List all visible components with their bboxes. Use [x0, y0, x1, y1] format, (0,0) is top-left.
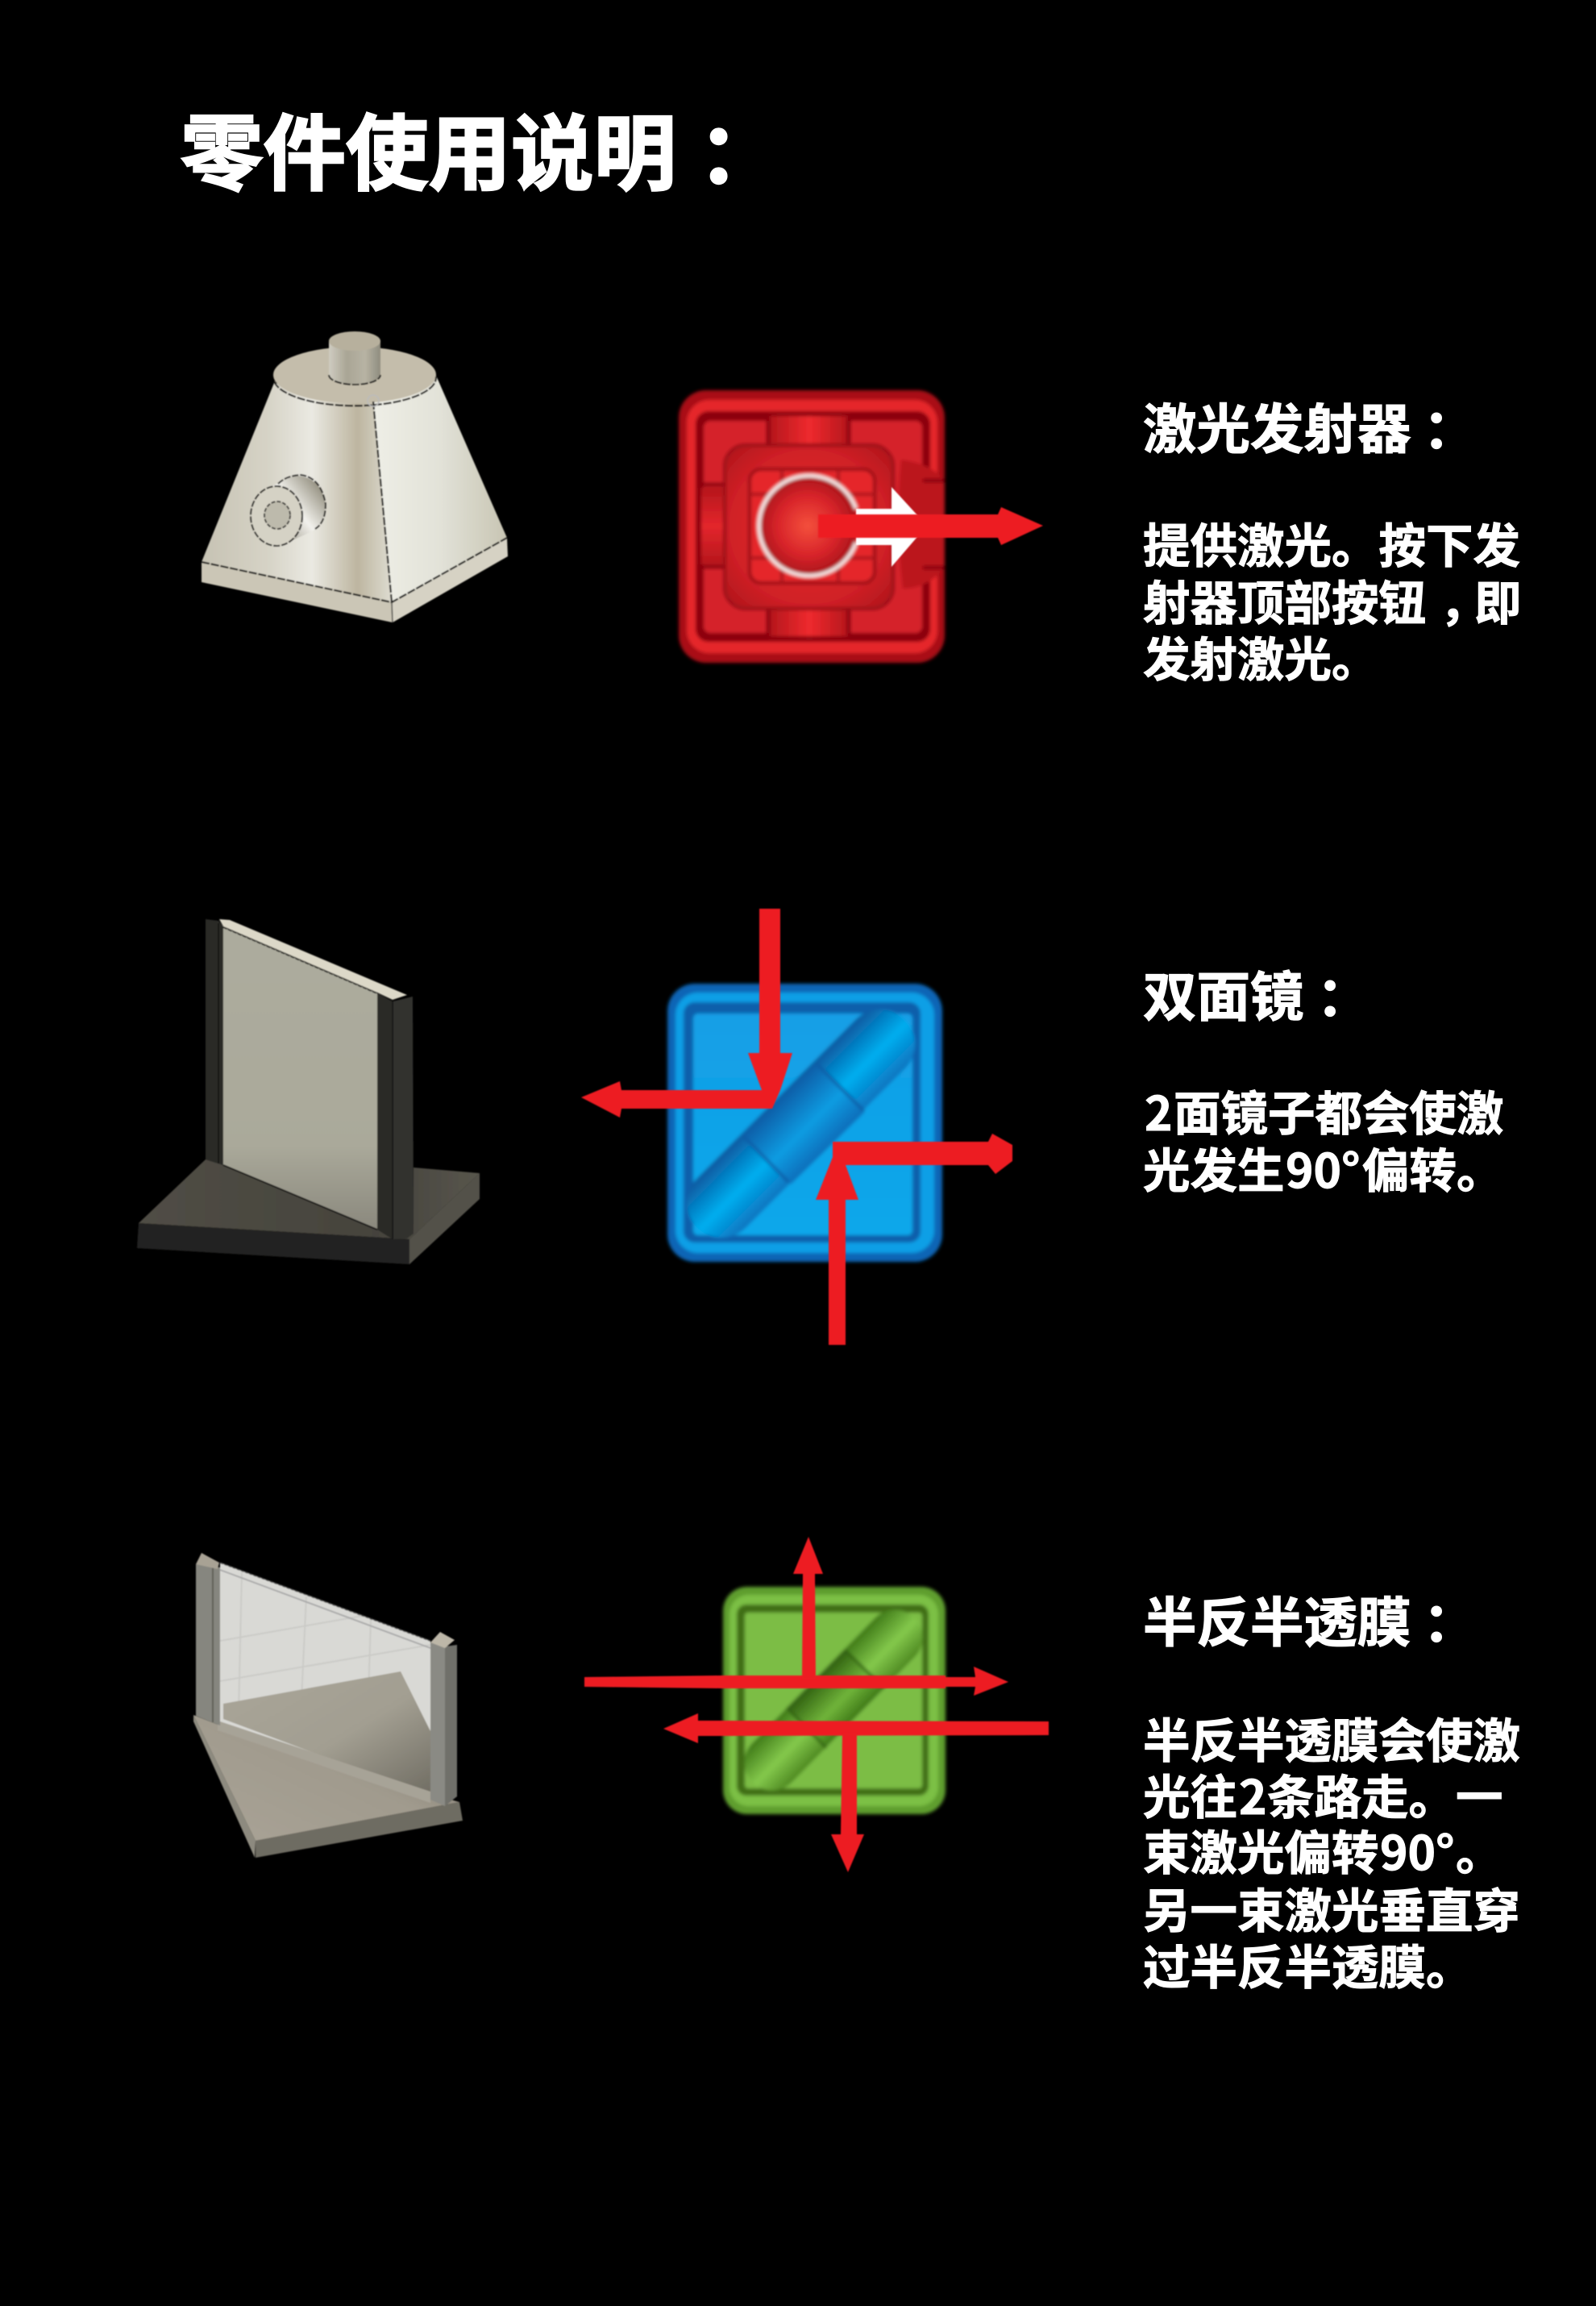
text: laser emitter description: 射器顶部按钮	[1143, 578, 1426, 631]
panel: half-reflective film	[193, 1537, 1520, 1995]
arrow: laser beam out	[818, 507, 1043, 545]
text: double-sided mirror description: 偏转。	[1362, 1146, 1504, 1198]
text: half-reflective film description: 半反半透膜会使激	[1143, 1716, 1520, 1768]
text: half-reflective film description: 束激光偏转	[1143, 1828, 1379, 1880]
icon: red emitter tile	[679, 390, 1043, 663]
laser nozzle	[251, 475, 326, 546]
text: laser emitter description	[1143, 401, 1522, 687]
text: half-reflective film description: 。	[1456, 1828, 1503, 1880]
text: laser emitter description: 激光发射器：	[1143, 401, 1477, 460]
arrow: upper beam reflected left	[581, 909, 792, 1118]
text: laser emitter description: ，	[1440, 578, 1487, 631]
text: laser emitter description: 发射激光。	[1143, 635, 1379, 687]
3D model: double-sided mirror	[137, 919, 480, 1264]
text: half-reflective film description: 光往	[1143, 1772, 1237, 1825]
arrow: beam passing left	[663, 1713, 1049, 1743]
text: half-reflective film description: 半反半透膜：	[1143, 1594, 1477, 1654]
text: double-sided mirror description: 90°	[1286, 1133, 1361, 1201]
text: half-reflective film description: 另一束激光垂直穿	[1143, 1886, 1520, 1938]
text: half-reflective film description: 过半反半透膜。	[1143, 1942, 1473, 1995]
icon: blue mirror tile	[581, 909, 1012, 1345]
white arrow glyph	[856, 487, 927, 567]
arrow: lower beam reflected right	[816, 1134, 1012, 1345]
arrow: beam reflected down	[831, 1734, 864, 1872]
icon: green film tile	[584, 1537, 1049, 1872]
text: half-reflective film description: 条路走。一	[1267, 1772, 1503, 1825]
title: 零件使用说明 ：	[181, 108, 780, 201]
panel: laser emitter	[202, 331, 1522, 687]
top button	[329, 331, 380, 385]
text: half-reflective film description: 2	[1239, 1759, 1267, 1828]
text: double-sided mirror description	[1143, 968, 1504, 1201]
arrow: beam reflected up	[793, 1537, 823, 1679]
text: double-sided mirror description: 光发生	[1143, 1146, 1285, 1198]
panel: double-sided mirror	[137, 909, 1504, 1345]
text: half-reflective film description: 90°	[1380, 1815, 1455, 1884]
text: half-reflective film description	[1143, 1594, 1520, 1995]
infographic canvas	[137, 111, 1520, 1990]
text: double-sided mirror description: 双面镜：	[1143, 968, 1370, 1028]
text: double-sided mirror description: 面镜子都会使激	[1174, 1088, 1504, 1141]
text: double-sided mirror description: 2	[1145, 1076, 1173, 1144]
arrow: beam passing right	[584, 1667, 1008, 1696]
text: laser emitter description: 即	[1474, 578, 1522, 631]
3D model: laser emitter	[202, 331, 508, 622]
3D model: half-reflective film	[193, 1553, 463, 1858]
text: laser emitter description: 提供激光。按下发	[1143, 521, 1520, 573]
